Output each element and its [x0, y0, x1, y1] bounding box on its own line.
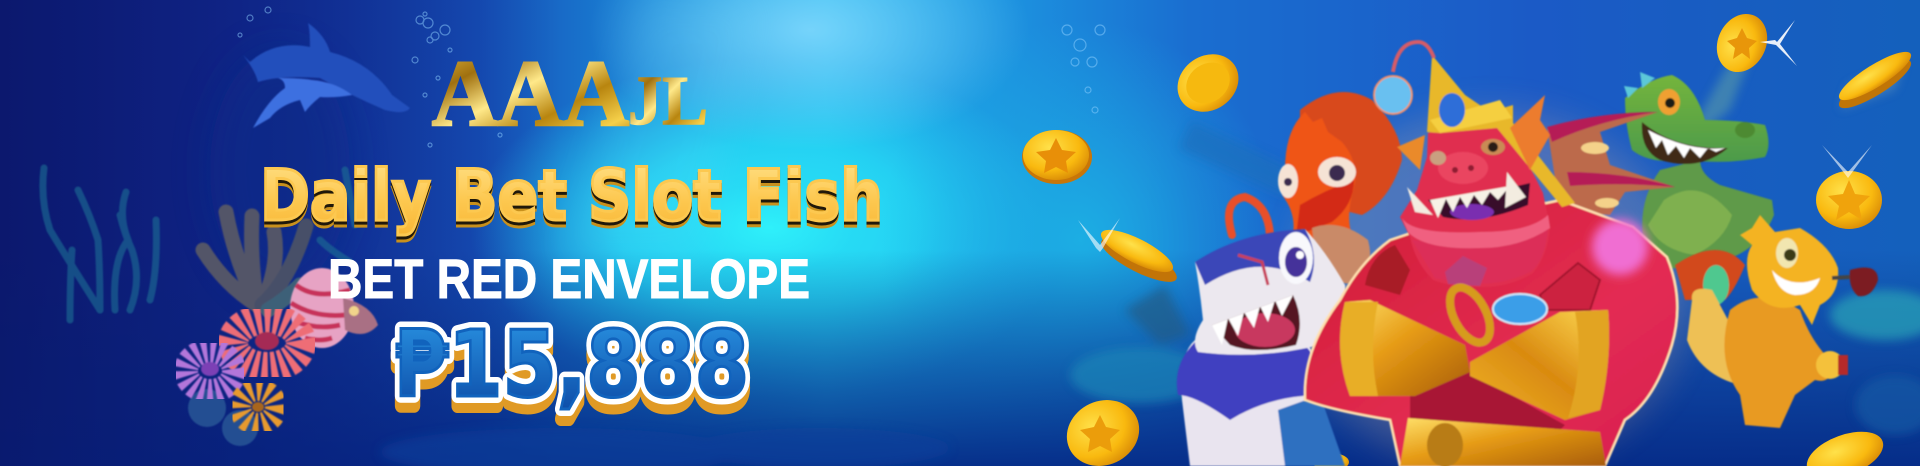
character: red boss with crown	[1305, 42, 1677, 466]
amount: ₱15,888: ₱15,888	[394, 321, 749, 428]
character: shark	[1177, 229, 1346, 466]
heading: Daily Bet Slot Fish: Daily Bet Slot Fish	[260, 158, 883, 240]
gold ring	[1442, 281, 1498, 349]
seabed rocks under anemones	[188, 389, 258, 446]
dolphins	[243, 23, 410, 128]
subheading: BET RED ENVELOPE: BET RED ENVELOPE	[328, 247, 810, 310]
coral: grey tubes	[203, 212, 306, 310]
anemone: purple	[186, 351, 234, 391]
gauntlet left	[1340, 300, 1470, 396]
seaweed, left	[43, 168, 355, 320]
coin	[1313, 453, 1349, 466]
anemone: red	[233, 319, 301, 367]
nautilus	[290, 268, 378, 348]
lure stalk	[1393, 42, 1434, 72]
wrist gem	[1493, 294, 1547, 324]
crown	[1427, 55, 1575, 207]
small dolphin	[253, 78, 352, 128]
coin	[1056, 388, 1150, 466]
character: crocodile	[1624, 72, 1774, 270]
gold coins	[1022, 6, 1916, 466]
abdomen	[1410, 372, 1565, 440]
tusks	[1407, 187, 1433, 215]
snout	[1438, 152, 1488, 184]
crown gem	[1439, 93, 1465, 127]
amount: ₱15,888: ₱15,888	[394, 311, 749, 418]
coin	[1022, 130, 1092, 184]
coin	[1096, 222, 1182, 290]
logo: AAAJL: AAA	[432, 42, 629, 146]
gauntlet right	[1470, 310, 1609, 420]
bubbles	[238, 7, 1105, 147]
wings	[1547, 112, 1675, 215]
sparkles	[1078, 20, 1872, 252]
character: yellow fish creature	[1675, 215, 1878, 428]
seabed silhouettes	[380, 428, 950, 466]
character: octopus	[1229, 92, 1402, 285]
warm glow around boss	[1290, 110, 1690, 466]
heading: Daily Bet Slot Fish: Daily Bet Slot Fish	[260, 155, 883, 237]
coin trail beams	[1680, 30, 1905, 150]
scene: sunken ruins and rocks, right	[1070, 121, 1920, 435]
right fist	[1540, 263, 1600, 310]
octopus face	[1282, 112, 1355, 240]
lower jowl shade	[1412, 228, 1548, 284]
lip	[1402, 215, 1550, 248]
coin	[1166, 43, 1250, 123]
left shoulder shade	[1365, 245, 1410, 295]
big dolphin	[243, 23, 410, 112]
mouth	[1428, 183, 1530, 219]
logo: AAAJL: JL	[628, 63, 708, 140]
octopus head	[1300, 92, 1402, 215]
coin	[1708, 6, 1776, 80]
anemone: orange	[240, 390, 276, 424]
collar	[1312, 225, 1370, 285]
amount: ₱15,888: ₱15,888	[394, 311, 749, 418]
lure orb	[1374, 76, 1412, 114]
head	[1400, 123, 1550, 287]
heading: Daily Bet Slot Fish: Daily Bet Slot Fish	[260, 161, 883, 243]
coin	[1801, 423, 1889, 466]
belt	[1400, 418, 1606, 466]
coin	[1834, 44, 1916, 116]
spikes	[1510, 95, 1550, 170]
eyes	[1430, 151, 1446, 165]
torso	[1305, 200, 1677, 466]
coin	[1816, 171, 1882, 229]
